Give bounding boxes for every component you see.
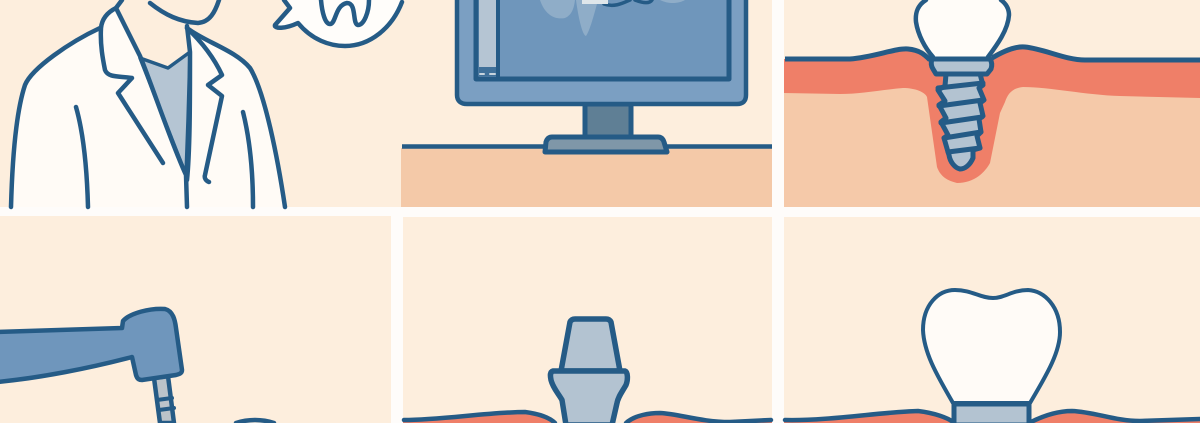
- icon: crown: [923, 290, 1060, 403]
- icon: implant screw: [931, 59, 992, 169]
- gum: [784, 411, 1200, 423]
- panel: consultation: [0, 0, 772, 207]
- icon: monitor showing x-ray: [401, 0, 772, 207]
- monitor frame: [457, 0, 746, 104]
- monitor screen: [476, 0, 729, 79]
- icon: dental handpiece: [0, 309, 182, 423]
- icon: speech bubble with tooth: [275, 0, 403, 46]
- gum: [403, 412, 772, 423]
- panel: final crown: [784, 217, 1200, 423]
- gum: [784, 47, 1200, 183]
- icon: gum top arc: [236, 420, 274, 423]
- icon: crown: [916, 0, 1009, 57]
- monitor stand: [585, 104, 631, 138]
- panel: implant in bone: [784, 0, 1200, 207]
- panel: drilling: [0, 216, 391, 423]
- desk: [401, 148, 772, 207]
- gum line: [785, 47, 1200, 60]
- bone: [784, 60, 1200, 207]
- panel: abutment: [403, 217, 772, 423]
- icon: abutment: [954, 404, 1029, 423]
- icon: abutment: [550, 319, 627, 423]
- icon: dentist in white coat: [11, 0, 286, 207]
